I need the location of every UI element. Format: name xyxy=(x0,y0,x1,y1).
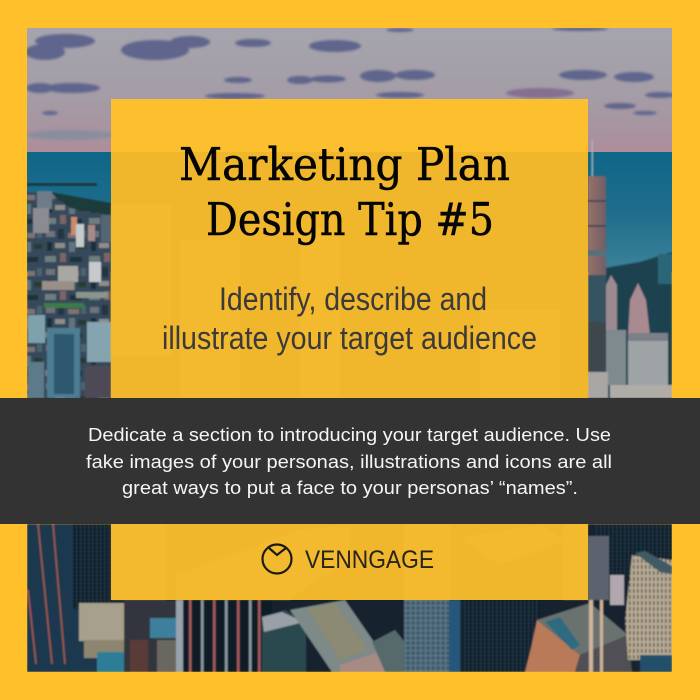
bottom base xyxy=(110,524,660,672)
icon: clock circle xyxy=(262,544,292,574)
band text: great ways to put a face to your personas’ “names”. xyxy=(122,478,578,498)
copper building xyxy=(525,620,580,672)
ghost buildings showing through panel xyxy=(111,205,588,600)
pier xyxy=(27,183,97,186)
dark text band xyxy=(0,398,700,524)
subtitle xyxy=(162,281,537,356)
band background xyxy=(0,398,700,524)
panel lower part over the city xyxy=(111,152,588,600)
right shore and tower xyxy=(588,252,672,400)
subtitle line 2: illustrate your target audience xyxy=(162,320,537,356)
title xyxy=(179,138,510,246)
bottom centre striped tower xyxy=(177,600,272,672)
clouds xyxy=(25,27,675,140)
subtitle line 1: Identify, describe and xyxy=(219,281,487,317)
low roofs xyxy=(262,610,306,672)
band text xyxy=(86,425,612,498)
title line 1: Marketing Plan xyxy=(179,138,510,191)
sky xyxy=(27,28,672,153)
upper right dark block and tower xyxy=(596,524,672,576)
band text: fake images of your personas, illustrations and icons are all xyxy=(86,452,612,472)
logo wordmark: VENNGAGE xyxy=(305,546,434,574)
yellow content panel xyxy=(111,99,588,600)
left shore xyxy=(27,192,111,400)
title line 2: Design Tip #5 xyxy=(206,193,494,246)
band text: Dedicate a section to introducing your target audience. Use xyxy=(88,425,611,445)
panel upper part over the sky xyxy=(111,99,588,152)
Venngage logo xyxy=(262,544,434,574)
lake xyxy=(27,152,672,272)
bottom left tower xyxy=(27,524,97,672)
city and buildings xyxy=(27,140,672,672)
